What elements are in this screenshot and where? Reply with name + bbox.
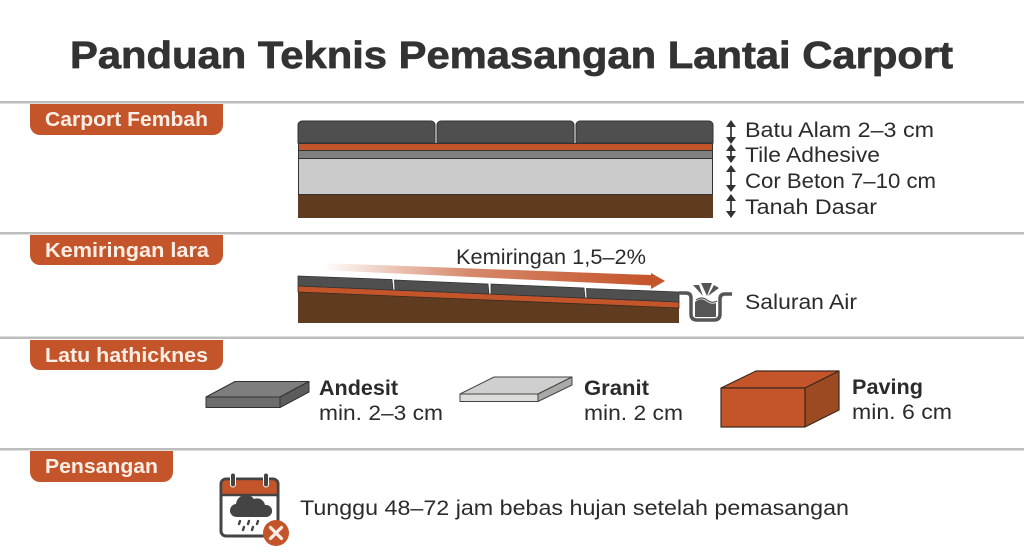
layer labels: Cor Beton 7–10 cm bbox=[745, 170, 936, 193]
dimension arrows bbox=[726, 120, 736, 218]
andesit label bbox=[319, 377, 443, 425]
layer diagram bbox=[298, 121, 713, 218]
section label: Carport Fembah: Carport Fembah bbox=[45, 109, 208, 131]
section label: Pensangan bbox=[30, 451, 173, 482]
icon: drain bbox=[679, 283, 732, 320]
rain note: Tunggu 48–72 jam bebas hujan setelah pemasangan bbox=[300, 497, 849, 520]
dividers bbox=[0, 101, 1024, 450]
drain label: Saluran Air bbox=[745, 291, 857, 314]
panel: thickness bbox=[30, 340, 952, 427]
section label: Latu hathicknes: Latu hathicknes bbox=[45, 345, 208, 367]
layer labels: Batu Alam 2–3 cm bbox=[745, 119, 934, 142]
section label: Carport Fembah bbox=[30, 104, 223, 135]
section label: Pensangan: Pensangan bbox=[45, 456, 158, 478]
granit label: Granit bbox=[584, 377, 649, 400]
title: Panduan Teknis Pemasangan Lantai Carport bbox=[70, 35, 953, 77]
icon: andesit slab bbox=[206, 382, 309, 408]
icon: paving block bbox=[721, 371, 839, 427]
slope label: Kemiringan 1,5–2% bbox=[456, 246, 646, 269]
paving label: Paving bbox=[852, 376, 923, 399]
section label: Latu hathicknes bbox=[30, 340, 223, 370]
granit label: min. 2 cm bbox=[584, 402, 683, 425]
andesit label: min. 2–3 cm bbox=[319, 402, 443, 425]
paving label bbox=[852, 376, 952, 424]
icon: granit slab bbox=[460, 377, 572, 402]
slope arrow bbox=[322, 263, 665, 289]
icon: calendar with rain bbox=[221, 473, 289, 546]
layer labels: Tanah Dasar bbox=[745, 196, 877, 219]
section label: Kemiringan lara: Kemiringan lara bbox=[45, 240, 210, 262]
sloped floor bbox=[298, 276, 679, 323]
panel: carport layers bbox=[30, 104, 936, 219]
panel: installation bbox=[30, 451, 849, 546]
panel: slope bbox=[30, 235, 857, 323]
layer labels bbox=[745, 119, 936, 219]
paving label: min. 6 cm bbox=[852, 401, 952, 424]
section label: Kemiringan lara bbox=[30, 235, 223, 265]
layer labels: Tile Adhesive bbox=[745, 144, 880, 167]
andesit label: Andesit bbox=[319, 377, 398, 400]
granit label bbox=[584, 377, 683, 425]
